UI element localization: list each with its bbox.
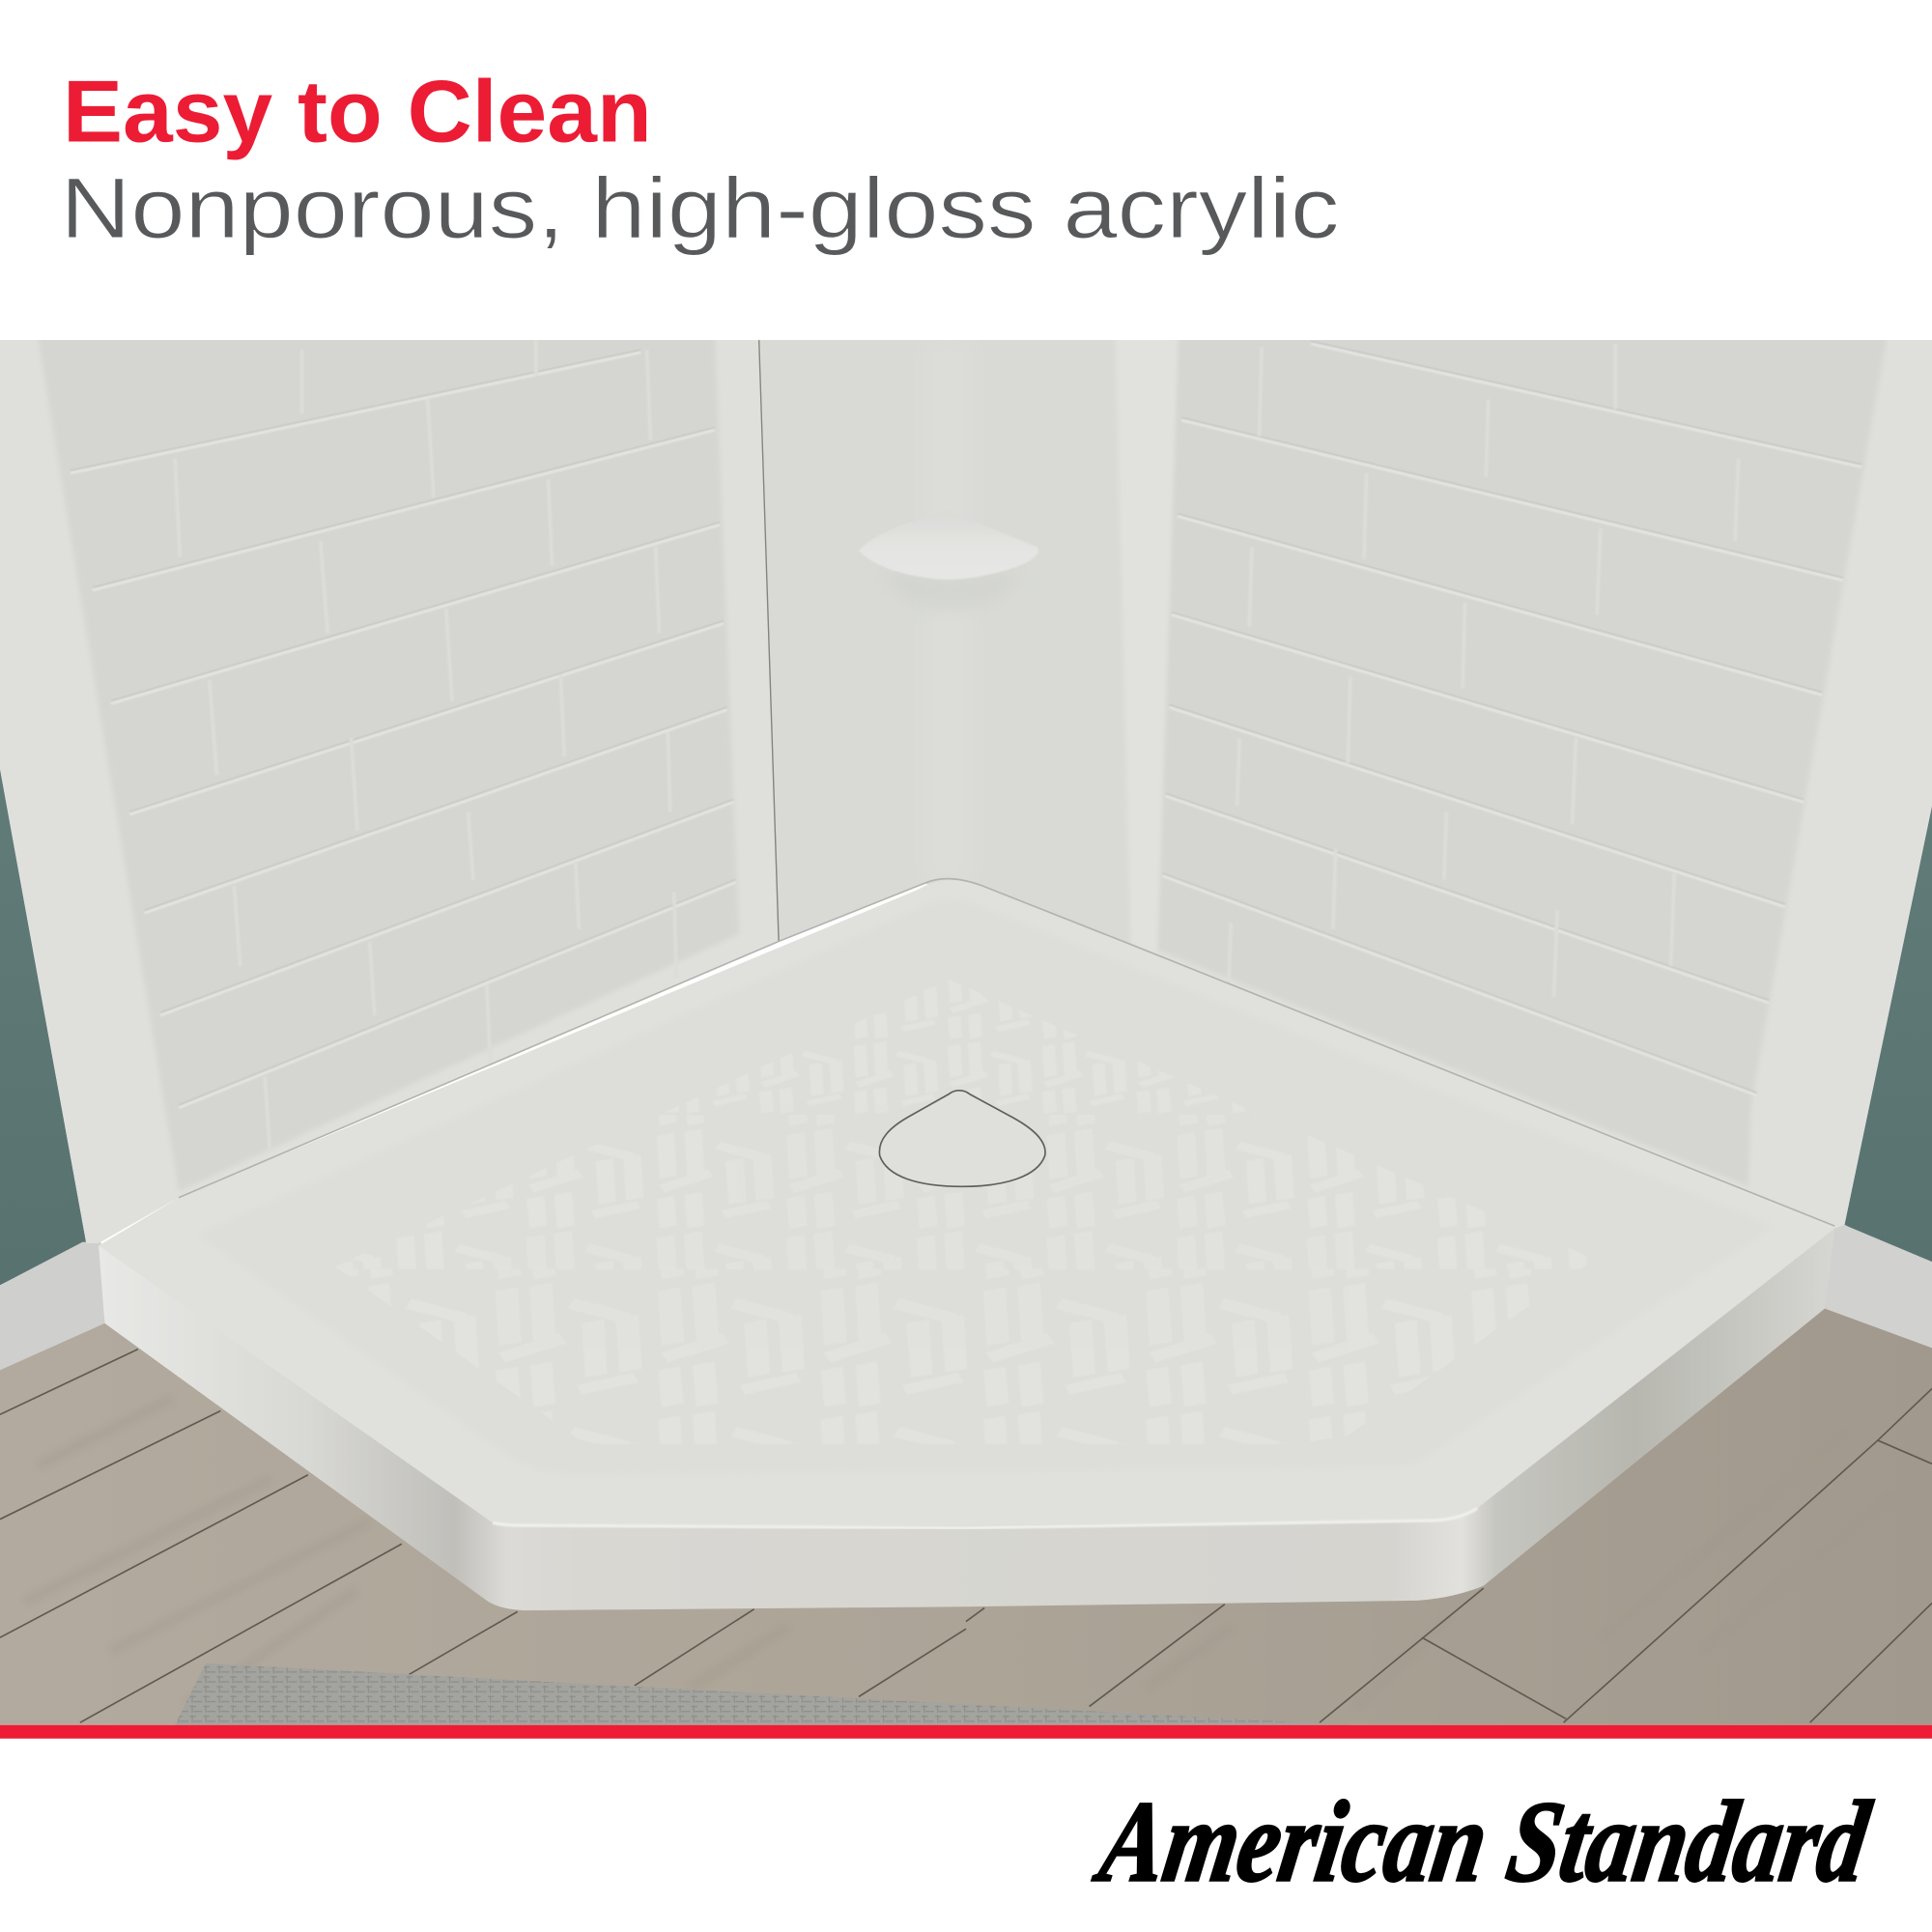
panel seam (759, 340, 779, 941)
bath rug (175, 1663, 1350, 1725)
anti-slip tread pattern (332, 974, 1614, 1454)
rim highlight (493, 1508, 1477, 1528)
title: Easy to Clean (63, 64, 652, 161)
shower base basin (197, 899, 1775, 1475)
red divider bar (0, 1725, 1932, 1739)
floor (0, 1300, 1932, 1725)
shower base rim (99, 880, 1834, 1525)
drain cover (879, 1091, 1045, 1186)
teal wall right (1844, 806, 1932, 1271)
corner shelf (860, 537, 1037, 597)
baseboard right (1825, 1220, 1932, 1348)
photo: shower base in corner (0, 332, 1932, 1725)
teal wall left (0, 769, 86, 1285)
subtitle: Nonporous, high-gloss acrylic (60, 159, 1339, 256)
shower base front face (99, 1230, 1834, 1610)
right wall panel (1115, 332, 1932, 1229)
left wall panel (0, 332, 779, 1243)
wall to base seam (179, 879, 1834, 1226)
baseboard left (0, 1242, 104, 1370)
center corner panel (760, 340, 1140, 948)
